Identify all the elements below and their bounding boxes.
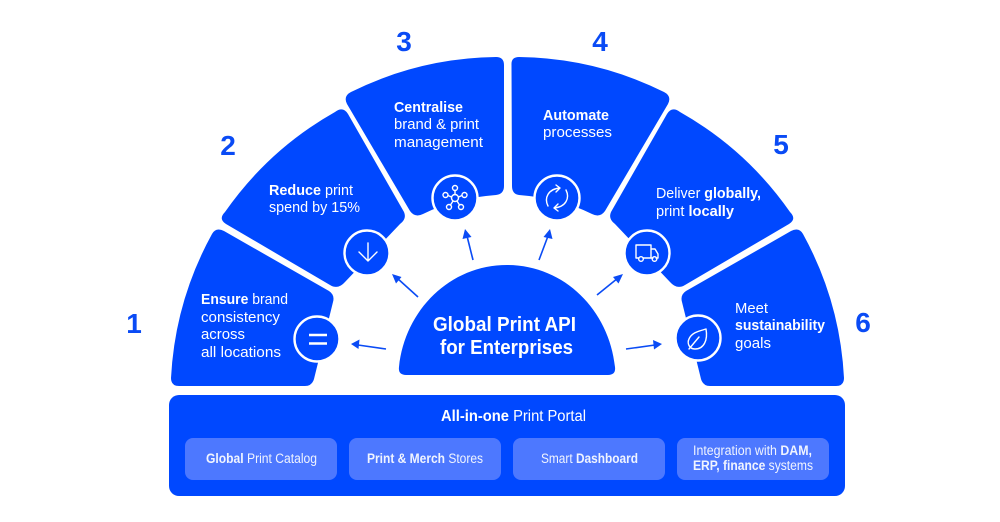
panel: segment 4 automate: [511, 57, 669, 215]
text: automate processes: [543, 107, 612, 141]
arrow: dome to 1: [351, 340, 386, 349]
icon: refresh cycle: [534, 176, 580, 220]
card: print and merch stores: Print & Merch Stores: [367, 451, 483, 466]
arrow: dome to 6: [626, 340, 662, 350]
arrow: dome to 2: [392, 274, 418, 297]
arrow: dome to 3: [462, 229, 473, 260]
icon: leaf: [676, 316, 720, 360]
card: global print catalog: [185, 438, 337, 480]
panel: central dome: [399, 265, 615, 375]
text: reduce print spend: [269, 182, 360, 216]
number 4: 4: [592, 26, 608, 57]
text: ensure brand consistency: [201, 291, 288, 361]
text: automate processes: processes: [543, 124, 612, 141]
text: ensure brand consistency: Ensure brand: [201, 291, 288, 308]
icon: delivery truck: [624, 230, 670, 276]
text: ensure brand consistency: consistency: [201, 309, 280, 326]
heading: global print api: for Enterprises: [440, 337, 573, 359]
text: centralise brand and print management: [394, 99, 484, 151]
panel: segment 6 sustainability: [682, 230, 844, 386]
panel: segment 1 ensure brand consistency: [171, 230, 334, 386]
panel: segment 5 deliver globally: [610, 109, 793, 287]
heading: global print api: Global Print API: [433, 314, 576, 336]
icon: equals: [294, 316, 340, 362]
text: centralise brand and print management: management: [394, 134, 484, 151]
card: smart dashboard: [513, 438, 665, 480]
text: centralise brand and print management: Centralise: [394, 99, 463, 116]
text: deliver globally print locally: print locally: [656, 203, 735, 220]
text: ensure brand consistency: across: [201, 326, 245, 343]
text: deliver globally print locally: Deliver globally,: [656, 185, 761, 202]
card: smart dashboard: Smart Dashboard: [541, 451, 638, 466]
text: automate processes: Automate: [543, 107, 609, 124]
text: ensure brand consistency: all locations: [201, 344, 281, 361]
text: centralise brand and print management: brand & print: [394, 116, 480, 133]
text: meet sustainability goals: Meet: [735, 300, 769, 317]
text: meet sustainability goals: [735, 300, 826, 352]
card: print and merch stores: [349, 438, 501, 480]
icon: down arrow: [344, 230, 390, 276]
arrow: dome to 5: [597, 274, 623, 295]
panel: all-in-one print portal: [169, 395, 845, 496]
card: integration systems: ERP, finance systems: [693, 458, 813, 473]
arrow: dome to 4: [539, 229, 552, 260]
heading: all-in-one print portal: All-in-one Print Portal: [441, 408, 586, 425]
panel: segment 2 reduce print spend: [222, 109, 405, 287]
card: integration systems: [677, 438, 829, 480]
text: reduce print spend: Reduce print: [269, 182, 354, 199]
number 2: 2: [220, 130, 236, 161]
text: meet sustainability goals: sustainability: [735, 317, 826, 334]
heading: global print api: [433, 314, 576, 359]
number 5: 5: [773, 129, 789, 160]
number 6: 6: [855, 307, 871, 338]
text: deliver globally print locally: [656, 185, 761, 220]
card: global print catalog: Global Print Catalog: [206, 451, 317, 466]
card: integration systems: Integration with DAM,: [693, 443, 812, 458]
panel: segment 3 centralise: [346, 57, 504, 215]
text: reduce print spend: spend by 15%: [269, 199, 360, 216]
icon: network hub: [432, 176, 478, 220]
number 3: 3: [396, 26, 412, 57]
number 1: 1: [126, 308, 142, 339]
text: meet sustainability goals: goals: [735, 335, 771, 352]
